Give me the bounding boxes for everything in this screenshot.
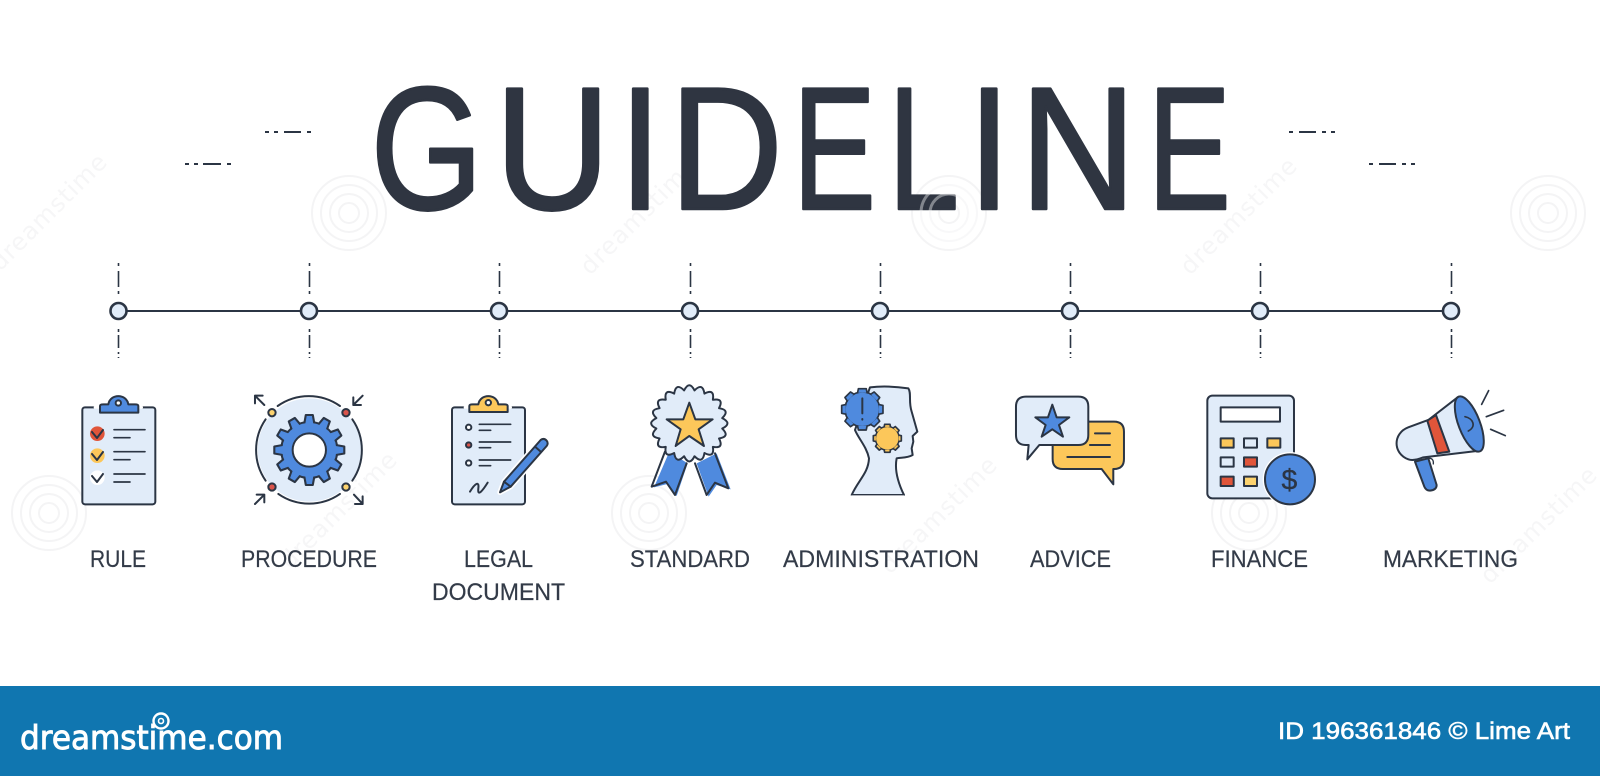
icon: procedure gear bbox=[255, 396, 363, 504]
icon: finance calculator bbox=[1207, 396, 1317, 507]
title: E bbox=[793, 52, 876, 247]
icon: marketing megaphone bbox=[1397, 391, 1505, 491]
watermark overlay on title bbox=[921, 185, 977, 241]
title: I bbox=[619, 52, 662, 247]
watermarks: dreamstime bbox=[1174, 151, 1303, 280]
icon: legal document clipboard bbox=[452, 396, 548, 504]
labels: MARKETING bbox=[1383, 546, 1518, 573]
title: I bbox=[968, 52, 1011, 247]
title: E bbox=[1148, 52, 1231, 247]
title: N bbox=[1020, 52, 1136, 247]
watermarks: dreamstime bbox=[874, 450, 1003, 579]
title: L bbox=[888, 52, 959, 247]
labels bbox=[90, 546, 1518, 606]
labels: RULE bbox=[90, 546, 146, 573]
labels: STANDARD bbox=[630, 546, 750, 573]
timeline bbox=[110, 263, 1459, 358]
title: G bbox=[370, 52, 483, 247]
decorative dashes bbox=[185, 132, 1415, 164]
icon: standard badge bbox=[651, 385, 731, 497]
labels: FINANCE bbox=[1211, 546, 1308, 573]
title: D bbox=[670, 52, 783, 247]
title: U bbox=[495, 52, 610, 247]
footer bar bbox=[0, 686, 1600, 776]
icon: advice speech bubbles bbox=[1016, 397, 1124, 484]
icon: administration head bbox=[842, 386, 917, 496]
logo: dreamstime.com bbox=[20, 718, 283, 757]
icon: rule clipboard bbox=[82, 396, 155, 504]
image id credit: ID 196361846 © Lime Art bbox=[1278, 718, 1570, 745]
watermarks bbox=[0, 147, 1600, 589]
icon: finance calculator: $ bbox=[1281, 464, 1297, 496]
watermarks: dreamstime bbox=[1474, 460, 1600, 589]
labels: ADVICE bbox=[1030, 546, 1111, 573]
labels: DOCUMENT bbox=[432, 579, 565, 606]
watermarks: dreamstime bbox=[574, 151, 703, 280]
watermarks: dreamstime bbox=[274, 445, 403, 574]
labels: ADMINISTRATION bbox=[783, 546, 979, 573]
labels: PROCEDURE bbox=[241, 546, 377, 573]
labels: LEGAL bbox=[464, 546, 533, 573]
